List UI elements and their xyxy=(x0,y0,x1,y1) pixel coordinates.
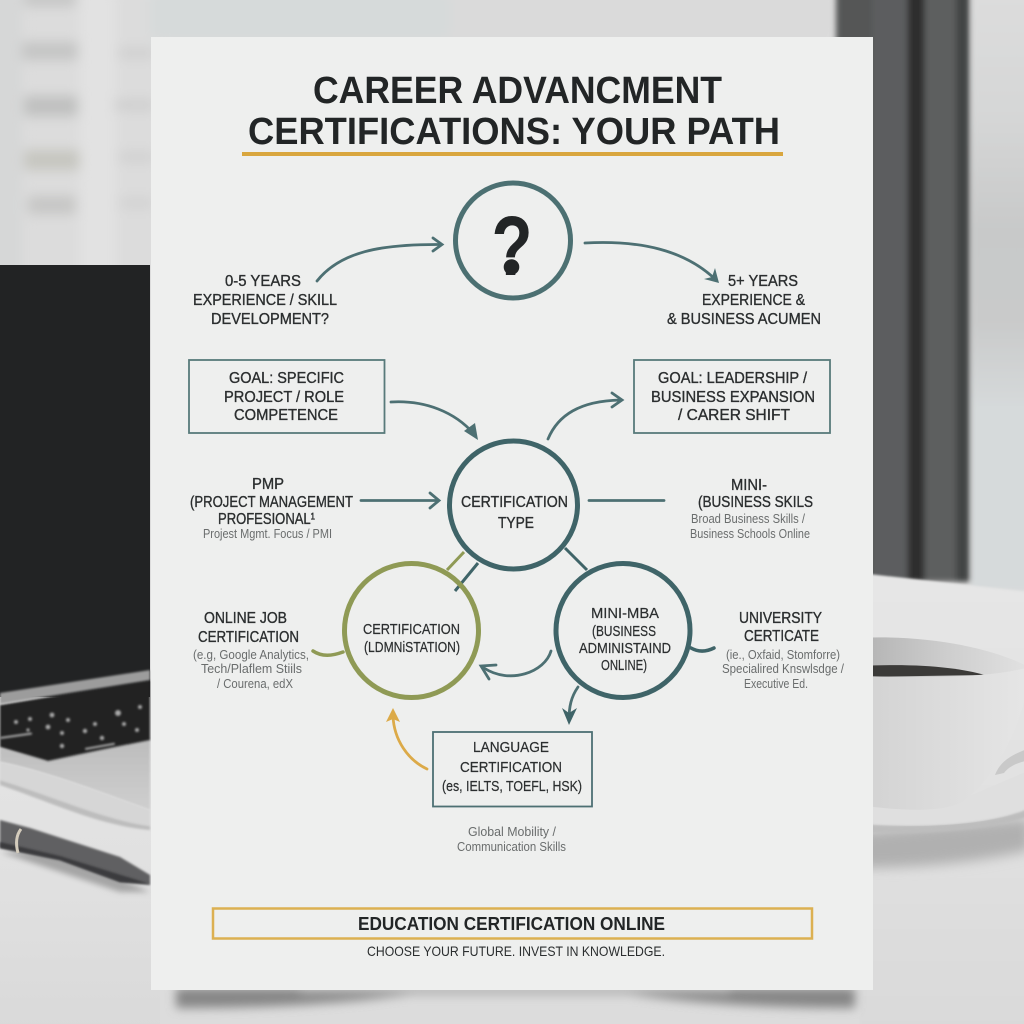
circle: certification type: CERTIFICATION xyxy=(461,494,568,511)
text: mini business skills: MINI- xyxy=(731,477,767,494)
text: PMP: (PROJECT MANAGEMENT xyxy=(190,494,353,511)
circle: mini-MBA: (BUSINESS xyxy=(592,624,656,640)
text: mini business skills: Business Schools Online xyxy=(690,527,810,541)
text: online job certification: CERTIFICATION xyxy=(198,629,299,646)
goal box: specific xyxy=(189,360,384,433)
question circle xyxy=(456,183,570,298)
text: global mobility: Communication Skills xyxy=(457,840,566,854)
text: university certificate: CERTICATE xyxy=(744,628,819,645)
text: PMP: PROFESIONAL¹ xyxy=(218,511,315,528)
circle: mini-MBA: ADMINISTAIND xyxy=(579,641,671,657)
goal box: specific: COMPETENCE xyxy=(234,407,338,424)
title: CERTIFICATIONS: YOUR PATH xyxy=(248,111,780,153)
arrow: language to certification (gold) xyxy=(386,708,427,769)
circle: certification type xyxy=(450,441,578,569)
arrow: early career to question xyxy=(317,238,442,281)
text: university certificate: Executive Ed. xyxy=(744,677,808,691)
text: PMP xyxy=(190,476,353,541)
text: mini business skills: (BUSINESS SKILS xyxy=(698,494,813,511)
text: 5+ years: & BUSINESS ACUMEN xyxy=(667,311,821,328)
box: language certification: (es, IELTS, TOEFL, HSK) xyxy=(442,779,582,795)
text: 0-5 years: 0-5 YEARS xyxy=(225,273,301,290)
text: PMP: PMP xyxy=(252,476,284,493)
arrow: question to senior career xyxy=(585,242,719,283)
goal box: specific: PROJECT / ROLE xyxy=(224,389,344,406)
circle: certification type: TYPE xyxy=(498,515,534,532)
circle: mini-MBA xyxy=(556,564,690,698)
box: language certification: CERTIFICATION xyxy=(460,760,562,776)
text: university certificate: UNIVERSITY xyxy=(739,610,822,627)
text: online job certification: Tech/Plaflem Stiils xyxy=(201,662,302,676)
circle: mini-MBA: MINI-MBA xyxy=(591,606,659,622)
goal box: leadership: / CARER SHIFT xyxy=(678,407,790,424)
text: 0-5 years xyxy=(193,273,337,328)
circle: certification administration: CERTIFICATION xyxy=(363,622,460,638)
arrow: mini-MBA to certification xyxy=(481,651,551,679)
text: PMP: Projest Mgmt. Focus / PMI xyxy=(203,527,332,541)
text: 0-5 years: DEVELOPMENT? xyxy=(211,311,329,328)
laptop xyxy=(0,265,150,830)
desk left xyxy=(0,680,160,1024)
text: global mobility: Global Mobility / xyxy=(468,825,557,839)
line: certification type to mini business xyxy=(589,499,664,502)
goal box: specific: GOAL: SPECIFIC xyxy=(229,370,344,387)
text: university certificate: (ie., Oxfaid, Stomforre) xyxy=(726,648,840,662)
question circle: ? xyxy=(492,199,532,293)
text: online job certification: ONLINE JOB xyxy=(204,610,287,627)
text: university certificate xyxy=(722,610,844,691)
coffee cup and saucer xyxy=(860,637,1024,868)
title xyxy=(248,70,780,153)
arrow: mini-MBA to language xyxy=(562,687,578,725)
pen xyxy=(0,820,150,892)
blurred window area top xyxy=(0,0,840,280)
connector lines between circles xyxy=(447,548,587,591)
goal box: leadership: BUSINESS EXPANSION xyxy=(651,389,815,406)
circle: certification administration xyxy=(344,564,478,698)
text: online job certification: / Courena, edX xyxy=(217,677,294,691)
box: language certification: LANGUAGE xyxy=(473,740,549,756)
title underline xyxy=(242,152,783,156)
dark window column xyxy=(836,0,1024,590)
text: global mobility xyxy=(457,825,566,854)
text: online job certification xyxy=(193,610,309,691)
text: 5+ years: 5+ YEARS xyxy=(728,273,798,290)
text: mini business skills: Broad Business Skills / xyxy=(691,512,805,526)
box: language certification xyxy=(433,732,592,806)
arrow: PMP to certification type xyxy=(361,493,439,508)
arrow: goal to certification type xyxy=(391,402,478,440)
footer banner: EDUCATION CERTIFICATION ONLINE xyxy=(358,914,665,934)
circle: certification administration: (LDMNiSTATION) xyxy=(364,640,460,656)
text: online job certification: (e.g, Google Analytics, xyxy=(193,648,309,662)
text: 5+ years xyxy=(667,273,821,328)
footer banner xyxy=(213,908,812,938)
title: CAREER ADVANCMENT xyxy=(313,70,722,112)
goal box: leadership: GOAL: LEADERSHIP / xyxy=(658,370,807,387)
desk right xyxy=(860,573,1024,1024)
circle: mini-MBA: ONLINE) xyxy=(601,658,647,674)
paper shadow xyxy=(176,988,855,1008)
arrow: certification type to goal xyxy=(548,393,622,439)
hook: mini-MBA to university xyxy=(691,648,714,651)
paper sheet xyxy=(151,37,873,990)
goal box: leadership xyxy=(634,360,830,433)
text: mini business skills xyxy=(690,477,813,541)
text: 0-5 years: EXPERIENCE / SKILL xyxy=(193,292,337,309)
text: university certificate: Specialired Knswlsdge / xyxy=(722,662,844,676)
hook: online job to olive circle xyxy=(313,651,343,655)
tagline: CHOOSE YOUR FUTURE. INVEST IN KNOWLEDGE. xyxy=(367,943,665,959)
text: 5+ years: EXPERIENCE & xyxy=(702,292,805,309)
